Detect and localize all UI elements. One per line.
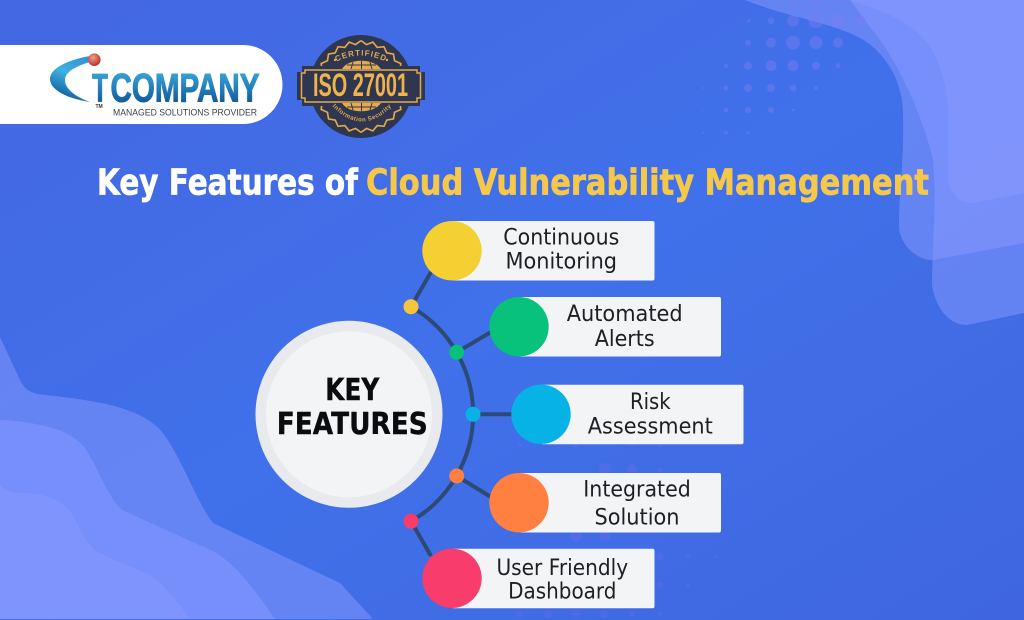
feature: continuous monitoring (422, 221, 654, 280)
feature: user friendly dashboard: User Friendly (496, 556, 628, 581)
feature: continuous monitoring: Monitoring (506, 249, 617, 274)
feature: risk assessment: Risk (630, 390, 671, 415)
feature: automated alerts: Alerts (595, 327, 655, 352)
logo swoosh icon (50, 53, 101, 102)
connector node: green (449, 345, 464, 360)
title: Cloud Vulnerability Management (366, 162, 929, 204)
feature: integrated solution (489, 473, 721, 532)
logo trademark: TM (96, 104, 103, 110)
feature: integrated solution: Solution (594, 505, 680, 530)
connector node: pink (404, 514, 418, 529)
connector node: yellow (404, 299, 418, 314)
feature: risk assessment (511, 385, 744, 444)
feature: continuous monitoring: Continuous (503, 226, 619, 251)
ISO 27001 badge: CERTIFIED (335, 50, 386, 61)
top-right background waves (745, 0, 1024, 325)
feature: user friendly dashboard: Dashboard (508, 579, 616, 604)
connector node: orange (449, 468, 464, 484)
logo wordmark: COMPANY (110, 66, 260, 110)
connector arc and branches (411, 272, 512, 556)
logo tagline: MANAGED SOLUTIONS PROVIDER (113, 108, 257, 118)
halftone dots lower right (516, 442, 718, 618)
title: Key Features of (97, 162, 358, 204)
feature: automated alerts (489, 297, 721, 356)
feature: risk assessment: Assessment (588, 414, 713, 439)
logo letter T: T (92, 66, 108, 110)
ISO 27001 badge (297, 35, 425, 138)
ISO 27001 badge: Information Security (332, 104, 391, 122)
ISO 27001 badge: ISO 27001 (313, 67, 408, 103)
halftone dots top right (702, 0, 866, 135)
central circle: key features: KEY (325, 373, 380, 408)
central circle: key features (256, 321, 442, 508)
feature: integrated solution: Integrated (583, 478, 691, 503)
bottom-left background waves (0, 337, 373, 619)
feature: user friendly dashboard (422, 549, 654, 608)
central circle: key features: FEATURES (277, 407, 428, 442)
title (97, 162, 929, 204)
connector node: blue (466, 407, 480, 422)
feature: automated alerts: Automated (567, 302, 683, 327)
company logo panel (0, 45, 282, 124)
